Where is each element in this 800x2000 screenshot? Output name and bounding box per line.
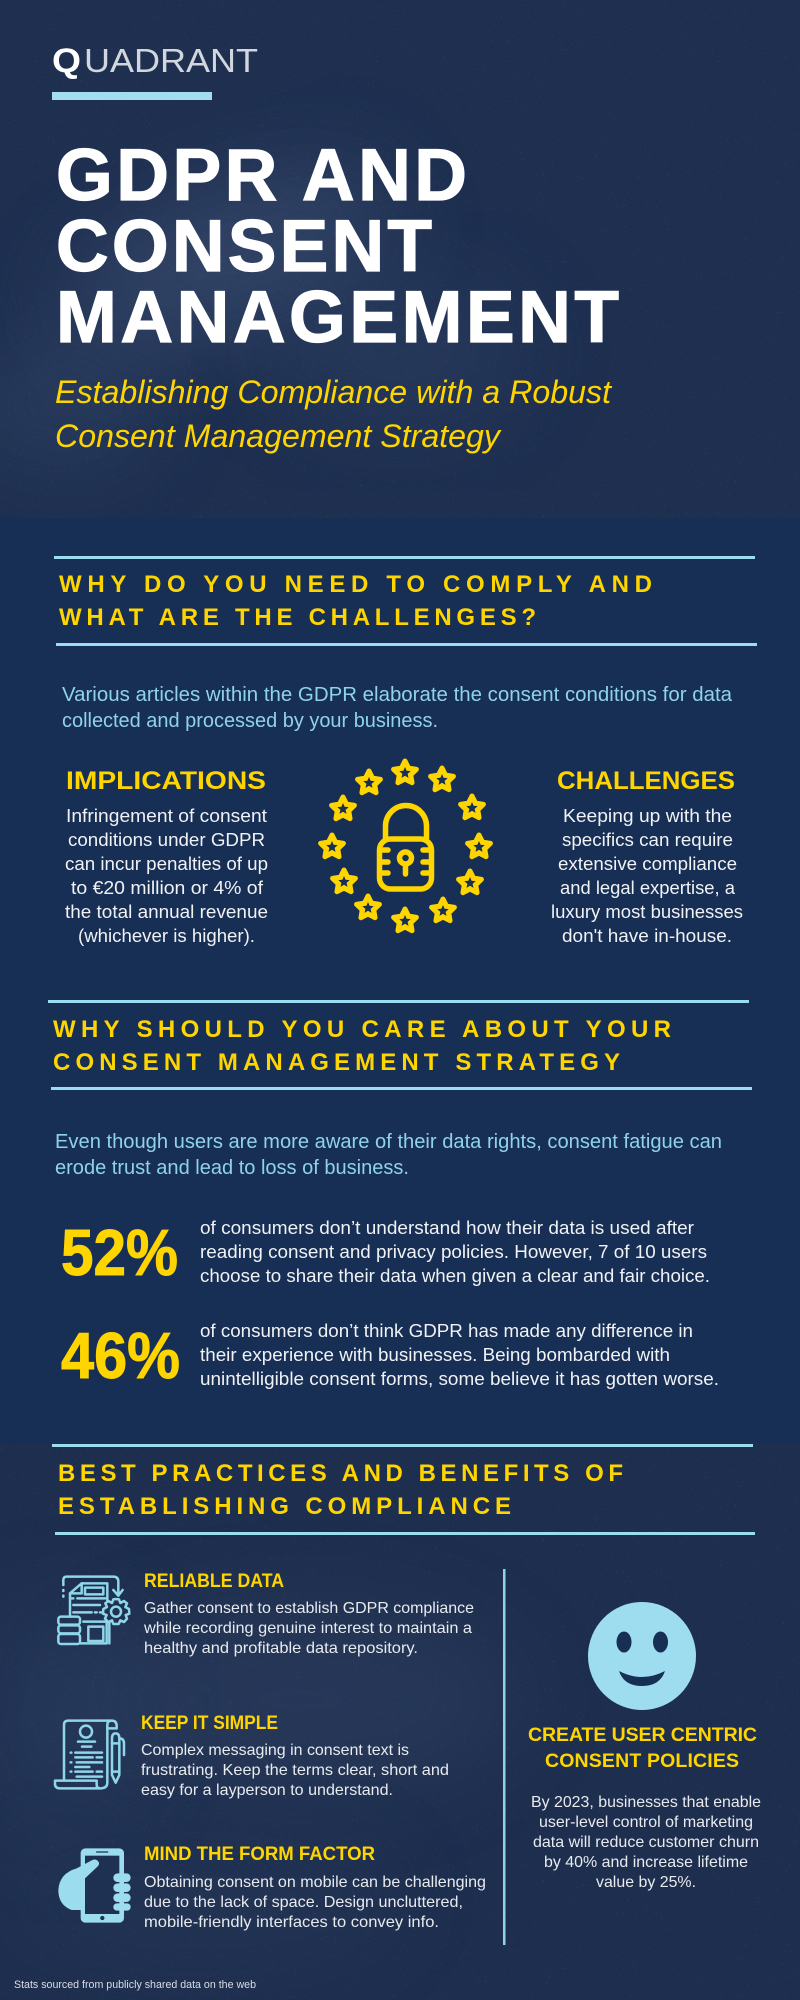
icon: EU stars padlock [321, 761, 490, 931]
panel: implications: conditions under GDPR [68, 829, 265, 850]
vertical divider [503, 1569, 506, 1945]
text block: keep it simple: Complex messaging in consent text is [141, 1742, 409, 1759]
icon: data document with gear [58, 1577, 129, 1644]
panel: implications: can incur penalties of up [65, 853, 268, 874]
stat: 52%: choose to share their data when given a clear and fair choice. [200, 1265, 710, 1286]
callout: user centric consent policies: value by 25%. [596, 1874, 696, 1891]
title: CONSENT [56, 206, 432, 287]
title [56, 135, 619, 358]
title: GDPR AND [56, 135, 467, 216]
stat: 52%: reading consent and privacy policies. However, 7 of 10 users [200, 1241, 707, 1262]
panel: challenges: CHALLENGES [557, 767, 735, 795]
text block: consent fatigue intro: erode trust and lead to loss of business. [55, 1157, 409, 1179]
panel: challenges: luxury most businesses [551, 901, 743, 922]
stat: 52%: of consumers don’t understand how their data is used after [200, 1217, 694, 1238]
icon: scroll and pen [55, 1721, 124, 1788]
text block: reliable data: while recording genuine interest to maintain a [143, 1620, 472, 1637]
panel: implications [65, 767, 268, 946]
text block: consent fatigue intro: Even though users are more aware of their data rights, consent fatigue can [55, 1131, 722, 1153]
panel: challenges: Keeping up with the [563, 805, 732, 826]
stat: 46% [61, 1319, 719, 1392]
text block: GDPR intro: Various articles within the GDPR elaborate the consent conditions for data [62, 684, 733, 706]
text block: mind the form factor: mobile-friendly interfaces to convey info. [144, 1914, 439, 1931]
callout: user centric consent policies [528, 1724, 761, 1891]
text block: mind the form factor: due to the lack of space. Design uncluttered, [144, 1894, 463, 1911]
panel: hero background [0, 0, 800, 518]
callout: user centric consent policies: CONSENT POLICIES [545, 1750, 739, 1772]
panel: challenges: and legal expertise, a [560, 877, 736, 898]
footnote: Stats sourced from publicly shared data on the web [14, 1979, 256, 1991]
heading: best practices: ESTABLISHING COMPLIANCE [58, 1493, 511, 1520]
stat: 52% [61, 1216, 710, 1289]
stat: 46%: 46% [61, 1319, 180, 1392]
text block: reliable data: healthy and profitable data repository. [144, 1640, 418, 1657]
stat: 46%: unintelligible consent forms, some believe it has gotten worse. [200, 1368, 719, 1389]
logo: Quadrant: Q [52, 42, 81, 80]
panel: challenges [551, 767, 743, 946]
text block: GDPR intro [62, 684, 733, 732]
text block: reliable data: RELIABLE DATA [144, 1570, 284, 1592]
text block: mind the form factor [144, 1843, 486, 1931]
text block: mind the form factor: MIND THE FORM FACTOR [144, 1843, 375, 1865]
text block: keep it simple: KEEP IT SIMPLE [141, 1712, 278, 1734]
text block: reliable data [143, 1570, 474, 1657]
panel: challenges: don't have in-house. [562, 925, 732, 946]
subtitle [55, 374, 612, 454]
text block: keep it simple: frustrating. Keep the terms clear, short and [141, 1762, 449, 1779]
callout: user centric consent policies: user-level control of marketing [539, 1814, 753, 1831]
text block: reliable data: Gather consent to establish GDPR compliance [144, 1600, 474, 1617]
text block: keep it simple: easy for a layperson to understand. [141, 1782, 393, 1799]
title: MANAGEMENT [56, 277, 619, 358]
text block: mind the form factor: Obtaining consent on mobile can be challenging [144, 1874, 486, 1891]
heading: why comply: WHAT ARE THE CHALLENGES? [59, 604, 536, 631]
text block: GDPR intro: collected and processed by your business. [62, 710, 438, 732]
logo underline bar [52, 92, 212, 100]
stat: 46%: of consumers don’t think GDPR has made any difference in [200, 1320, 693, 1341]
panel: implications: IMPLICATIONS [66, 767, 266, 795]
icon: hand holding phone [58, 1848, 131, 1923]
callout: user centric consent policies: By 2023, businesses that enable [531, 1794, 761, 1811]
panel: challenges: extensive compliance [558, 853, 737, 874]
text block: keep it simple [141, 1712, 449, 1799]
callout: user centric consent policies: CREATE USER CENTRIC [528, 1724, 757, 1746]
subtitle: Consent Management Strategy [55, 418, 502, 454]
heading: why care [48, 1000, 752, 1090]
heading: why care: WHY SHOULD YOU CARE ABOUT YOUR [53, 1016, 671, 1043]
icon: smiley face [588, 1602, 696, 1710]
panel: challenges: specifics can require [562, 829, 733, 850]
panel: implications: to €20 million or 4% of [71, 877, 264, 898]
panel: middle background [0, 518, 800, 1444]
heading: why comply: WHY DO YOU NEED TO COMPLY AND [59, 571, 652, 598]
callout: user centric consent policies: data will reduce customer churn [533, 1834, 759, 1851]
panel: implications: Infringement of consent [66, 805, 267, 826]
stat: 52%: 52% [61, 1216, 178, 1289]
heading: why care: CONSENT MANAGEMENT STRATEGY [53, 1049, 620, 1076]
subtitle: Establishing Compliance with a Robust [55, 374, 612, 410]
panel: implications: the total annual revenue [65, 901, 268, 922]
heading: best practices: BEST PRACTICES AND BENEFITS OF [58, 1460, 623, 1487]
stat: 46%: their experience with businesses. Being bombarded with [200, 1344, 670, 1365]
heading: why comply [54, 556, 757, 646]
panel: implications: (whichever is higher). [78, 925, 255, 946]
heading: best practices [52, 1444, 755, 1535]
text block: consent fatigue intro [55, 1131, 722, 1179]
callout: user centric consent policies: by 40% and increase lifetime [544, 1854, 748, 1871]
panel: bottom background [0, 1444, 800, 2000]
logo: Quadrant: UADRANT [84, 42, 258, 79]
